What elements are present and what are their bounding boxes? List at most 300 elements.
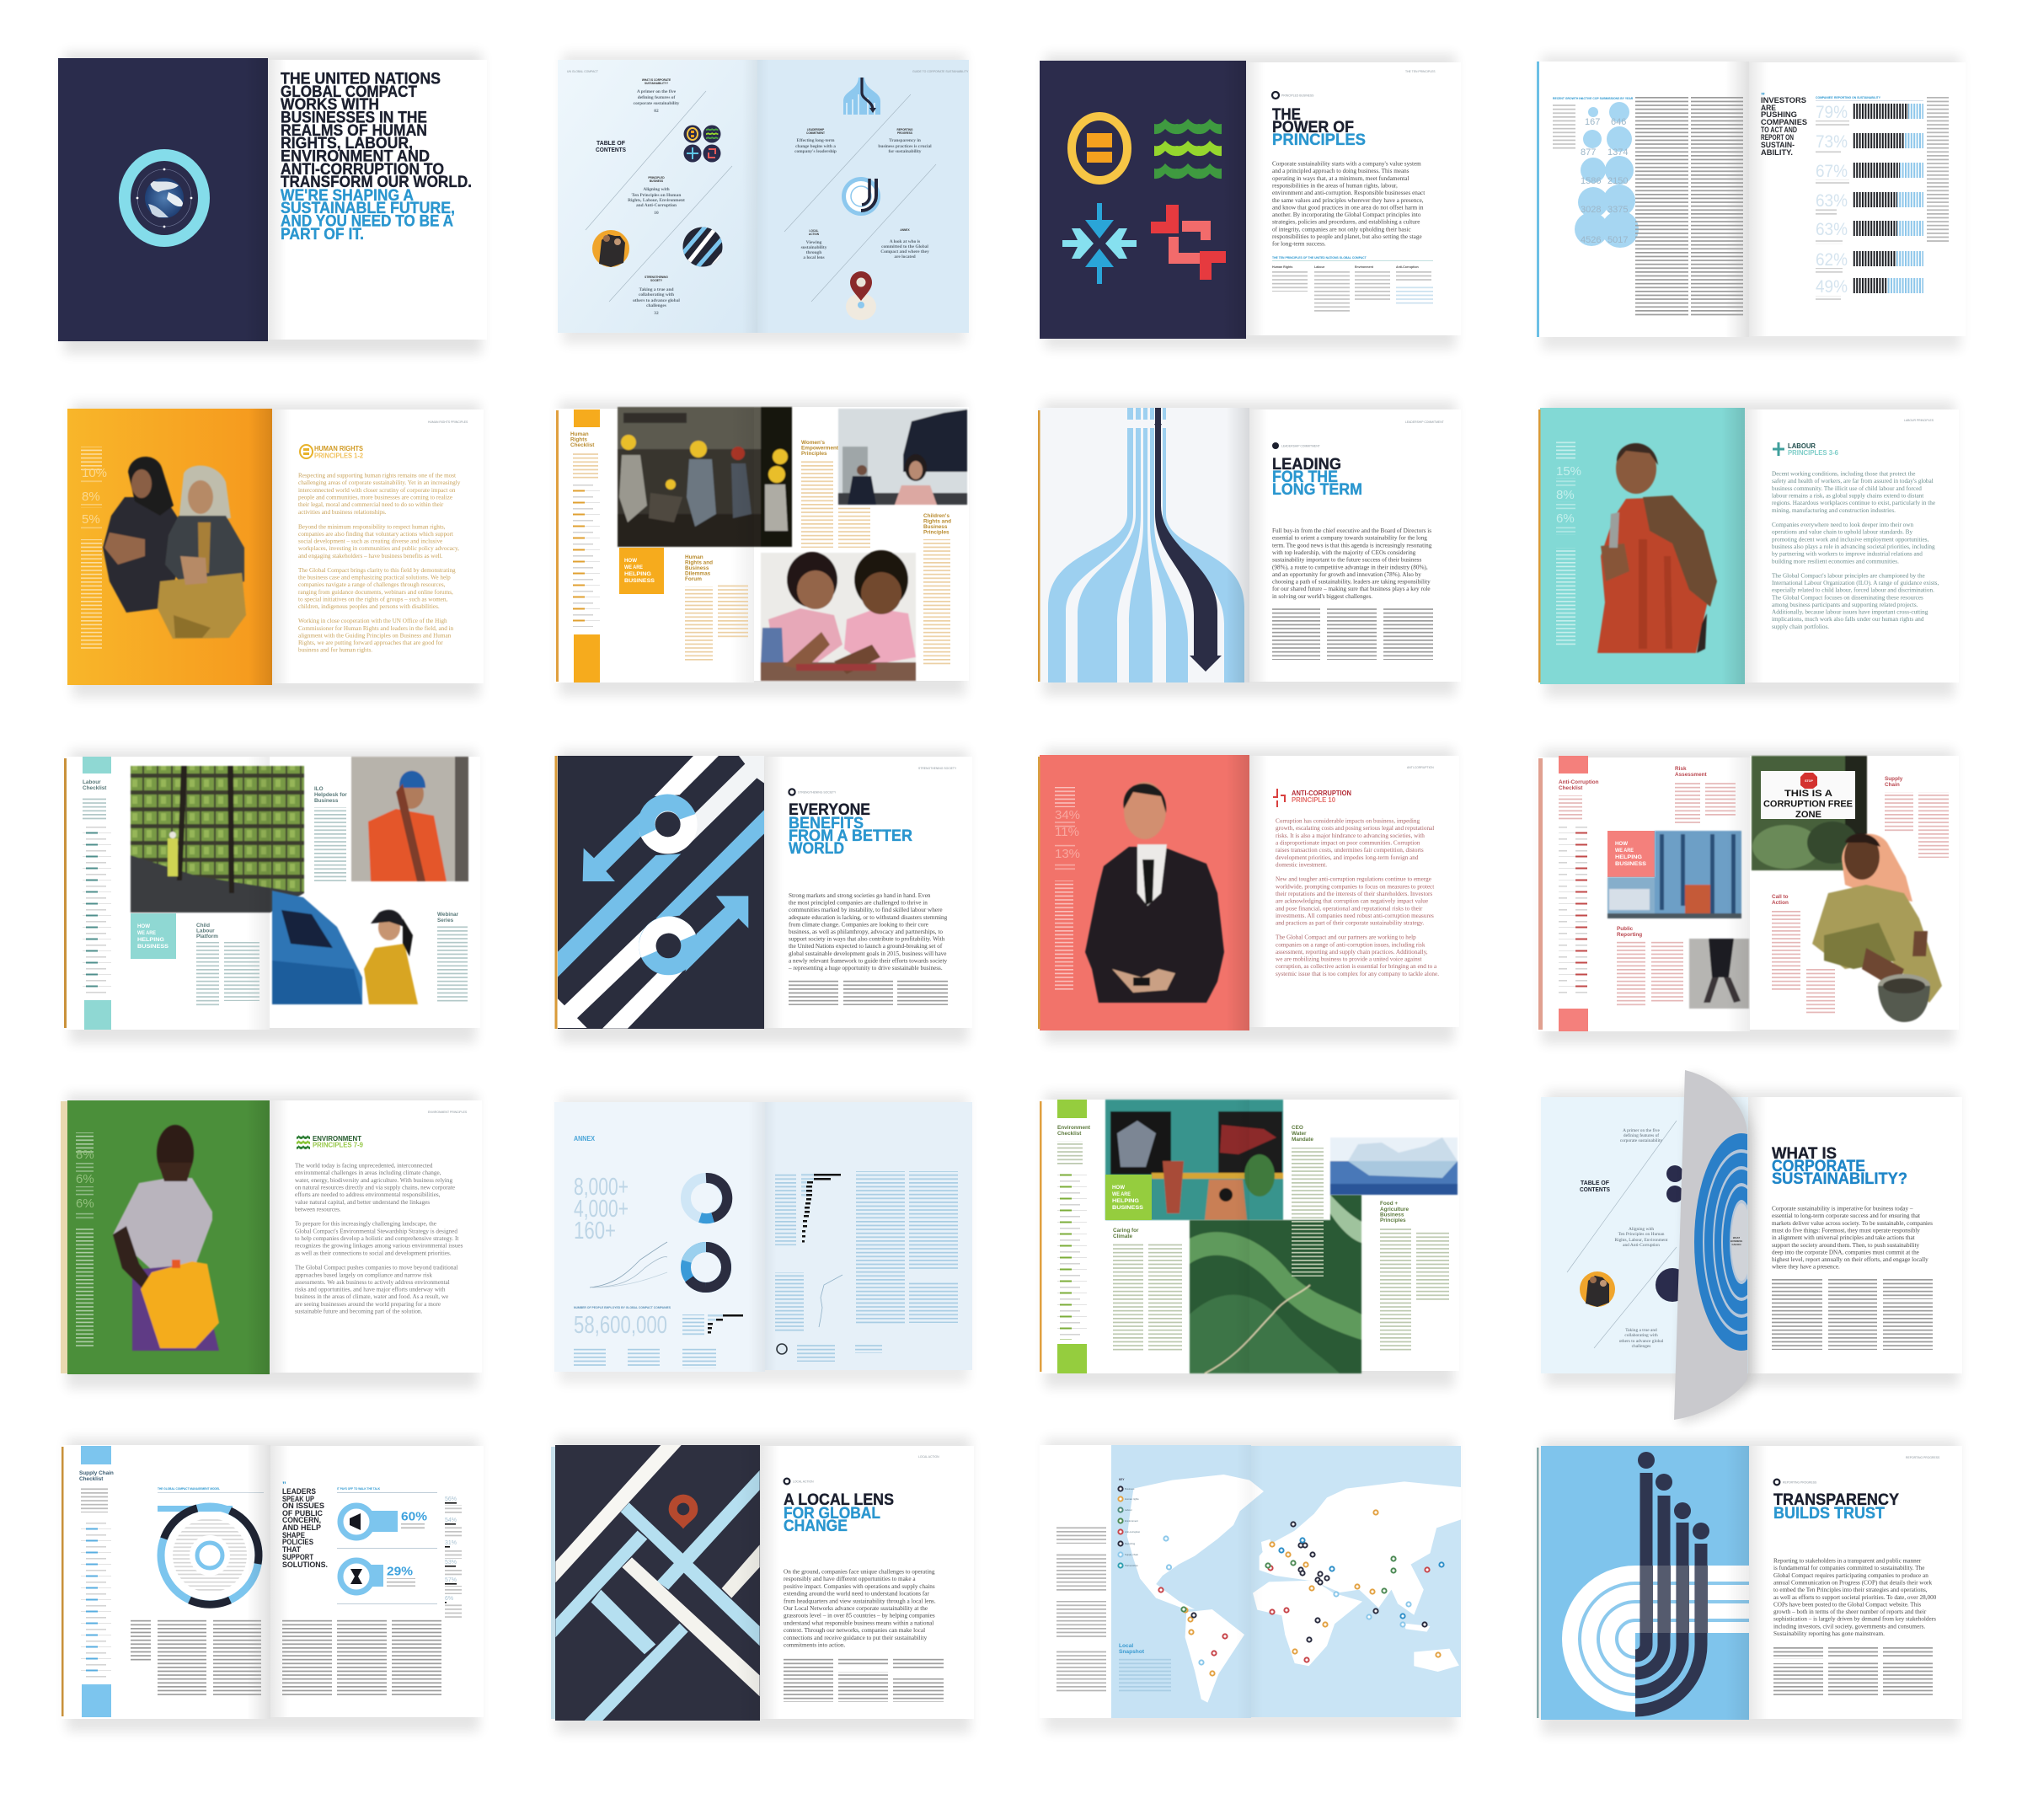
callout: how we are helping business: HELPING bbox=[1112, 1198, 1139, 1204]
text: labour body: promoting decent work and inclusive employment opportunities, bbox=[1772, 536, 1928, 543]
text: section headings: Child bbox=[196, 923, 210, 929]
figure: 58,600,000 employees: NUMBER OF PEOPLE EMPLOYED BY GLOBAL COMPACT COMPANIES bbox=[574, 1306, 671, 1309]
photo: smiling girl with yellow jug bbox=[113, 1125, 219, 1351]
text: local networks body: from headquarters and view sustainability through a local lens. bbox=[784, 1598, 936, 1604]
panel: spread 5, human rights bbox=[67, 403, 484, 698]
heading: leading for the long term: LONG TERM bbox=[1272, 481, 1362, 499]
text: sidebar facts: 8% bbox=[76, 1148, 94, 1162]
text: reporting body: Global Compact requires participating companies to produce an bbox=[1773, 1572, 1928, 1579]
text: local networks body: commitments into action. bbox=[784, 1641, 845, 1648]
text: anti-corruption body: corruption, as collective action is essential for bringing an end to a bbox=[1276, 963, 1437, 970]
text: environment body: water, energy, biodiversity and agriculture. With business relying bbox=[295, 1177, 453, 1184]
text: section label bbox=[789, 789, 837, 795]
text: human rights body: Rights, we are putting forward approaches that are good for bbox=[298, 640, 443, 646]
callout: how we are helping business bbox=[619, 548, 664, 594]
text: society body: communities marked by instability, to find skilled labour where bbox=[789, 907, 943, 913]
text: society body: Strong markets and strong societies go hand in hand. Even bbox=[789, 892, 931, 899]
text: leadership body: term. The good news is that this agenda is increasingly resonating bbox=[1272, 542, 1432, 549]
chart: business participants bars bbox=[682, 1314, 743, 1336]
text: section headings: Checklist bbox=[1057, 1131, 1082, 1137]
chart: stripe bars with percentages: 63% bbox=[1816, 191, 1848, 211]
text: anti-corruption body: companies on a range of anti-corruption issues, including risk bbox=[1276, 941, 1426, 948]
legend: map key: Business bbox=[1125, 1487, 1135, 1491]
text: contents entry, reporting progress: PROGRESS bbox=[897, 131, 912, 135]
chart: stripe bars with percentages: 49% bbox=[1816, 277, 1848, 297]
text: sidebar facts: 5% bbox=[82, 512, 100, 527]
callout: how we are helping business: HOW bbox=[1112, 1185, 1126, 1191]
heading: annex: ANNEX bbox=[574, 1134, 595, 1143]
text: anti-corruption body: worldwide, prompting companies to focus on measures to protect bbox=[1276, 883, 1434, 890]
text: environment body: business in the areas of climate, water and food. As a result, we bbox=[295, 1293, 448, 1300]
text: labour body: The Global Compact's labour principles are championed by the bbox=[1772, 572, 1925, 579]
text: section headings: Rights and bbox=[923, 519, 951, 524]
photo: warehouse stacks bbox=[131, 766, 304, 913]
text: leadership body: with top leadership, with the majority of CEOs considering bbox=[1272, 549, 1416, 556]
photo: girl with metal bowl bbox=[1812, 833, 1942, 1022]
table: the ten principles: Human Rights bbox=[1272, 265, 1292, 269]
sign: this is a corruption free zone: CORRUPTION FREE bbox=[1763, 799, 1853, 809]
callout: how we are helping business: HOW bbox=[624, 558, 638, 564]
text: human rights body: workplaces, investing in communities and public policy advocacy, bbox=[298, 545, 459, 552]
chart: 60 percent stat: IT PAYS OFF TO WALK THE TALK bbox=[337, 1487, 381, 1491]
panel: spread 16, what is corporate sustainability, with turning page bbox=[1541, 1070, 1962, 1423]
text: contents entry, local action: ACTION bbox=[809, 233, 820, 236]
text: intro body: Corporate sustainability starts with a company's value system bbox=[1272, 160, 1421, 167]
table: the ten principles: THE TEN PRINCIPLES OF THE UNITED NATIONS GLOBAL COMPACT bbox=[1272, 256, 1367, 260]
text: environment body: as well as their connections to social and development priorities. bbox=[295, 1250, 452, 1256]
callout: investors quote: INVESTORS bbox=[1761, 96, 1807, 105]
text: intro body: essential to long-term corporate success and for ensuring that bbox=[1772, 1212, 1920, 1219]
chart: stripe bars with percentages: 63% bbox=[1816, 220, 1848, 239]
heading: what is corporate sustainability: CORPORATE bbox=[1772, 1158, 1865, 1175]
text: contents entries: Taking a true and bbox=[1625, 1328, 1657, 1333]
text columns: local network detail bbox=[784, 1657, 944, 1702]
text: intro body: the same values and principles wherever they have a presence, bbox=[1272, 197, 1424, 204]
heading: anti-corruption principle 10 bbox=[1273, 789, 1351, 807]
chart: right column stats: 57% bbox=[445, 1577, 457, 1583]
heading: mission statement: WORKS WITH bbox=[281, 96, 379, 114]
heading: mission statement: TRANSFORM OUR WORLD. bbox=[281, 174, 472, 191]
text: human rights body: children, indigenous peoples and persons with disabilities. bbox=[298, 603, 440, 610]
text: intro body: highest level, report annually on their efforts, and engage locally bbox=[1772, 1256, 1928, 1263]
text: anti-corruption body: assessment, reporting and supply chain practices. Additionally, bbox=[1276, 949, 1428, 956]
text: human rights body: interconnected world with closer scrutiny of corporate impact on bbox=[298, 487, 456, 494]
text: anti-corruption body: development priorities, and impedes long-term foreign and bbox=[1276, 854, 1419, 861]
chart: growth bubbles: 1586 bbox=[1581, 176, 1601, 186]
callout: leaders quote: SHAPE bbox=[282, 1530, 305, 1539]
callout: investors quote: REPORT ON bbox=[1761, 133, 1794, 142]
text: society body: support society in ways that also contribute to profitability. With bbox=[789, 936, 945, 943]
text: section headings: Supply bbox=[1885, 776, 1903, 782]
photo: car assembly worker bbox=[272, 891, 418, 1004]
panel: spread 11, anti-corruption bbox=[1038, 748, 1459, 1043]
text: human rights body: alignment with the Guiding Principles on Business and Human bbox=[298, 632, 452, 639]
text: anti-corruption body: systemic issue that is too complex for any company to tackle alone. bbox=[1276, 971, 1439, 977]
text columns: detail bbox=[1772, 1279, 1933, 1350]
heading: mission statement: ANTI-CORRUPTION TO bbox=[281, 161, 444, 179]
text: contents entry, annex: A look at who is bbox=[890, 239, 920, 244]
callout: investors quote: ABILITY. bbox=[1761, 148, 1793, 158]
callout: how we are helping business: WE ARE bbox=[137, 930, 156, 936]
text: intro body: deep into the corporate DNA, companies must commit at the bbox=[1772, 1249, 1919, 1255]
chart: stripe bars with percentages: 67% bbox=[1816, 162, 1848, 181]
text: environment body: value natural capital, and better understand the linkages bbox=[295, 1199, 430, 1206]
text: section headings: Checklist bbox=[83, 785, 107, 791]
text: contents entry, reporting progress: REPORTING bbox=[897, 128, 913, 131]
text: labour body: operations and value chain to uphold labour standards. By bbox=[1772, 529, 1912, 536]
text: contents entry, strengthening society: challenges bbox=[646, 303, 666, 308]
heading: transparency builds trust: BUILDS TRUST bbox=[1773, 1505, 1885, 1523]
text: running head: ENVIRONMENT PRINCIPLES bbox=[428, 1111, 468, 1114]
text: section headings: Principles bbox=[923, 529, 949, 536]
heading: leading for the long term: FOR THE bbox=[1272, 468, 1338, 486]
text: contents entry, principled business: BUSINESS bbox=[650, 179, 663, 183]
callout: leaders quote: SPEAK UP bbox=[282, 1494, 314, 1503]
chart: management model circle: THE GLOBAL COMPACT MANAGEMENT MODEL bbox=[158, 1487, 220, 1491]
photo: two seated women bbox=[103, 457, 246, 639]
chart: growth lines bbox=[590, 1242, 667, 1287]
text: running heads: GUIDE TO CORPORATE SUSTAINABILITY bbox=[912, 70, 969, 73]
text: environment body: sustainable future and becoming part of the solution. bbox=[295, 1308, 423, 1314]
legend: map key: Partnerships bbox=[1125, 1564, 1138, 1567]
text: section headings: Business bbox=[685, 565, 709, 571]
text: leadership body: choosing a path of sustainability, leaders are taking responsibility bbox=[1272, 579, 1431, 586]
chart: stripe bars with percentages: 62% bbox=[1816, 250, 1848, 270]
text: sidebar facts bbox=[1556, 440, 1581, 646]
chart: growth bubbles: 3375 bbox=[1607, 205, 1628, 215]
text: running head: HUMAN RIGHTS PRINCIPLES bbox=[428, 420, 468, 424]
text: anti-corruption body: and practices as part of their corporate sustainability strategy. bbox=[1276, 920, 1424, 927]
sign: this is a corruption free zone: STOP bbox=[1805, 779, 1813, 783]
chart: 60 percent stat: 60% bbox=[401, 1510, 427, 1523]
heading: the power of principles: THE bbox=[1272, 106, 1301, 124]
text: contents entry, local action: sustainability bbox=[801, 245, 827, 250]
text: contents entry, local action: through bbox=[806, 250, 821, 255]
text: anti-corruption body: risks. It is also a major hindrance to advancing societies, with bbox=[1276, 832, 1425, 839]
text: section headings: Children's bbox=[923, 513, 949, 519]
text: human rights body: Beyond the minimum responsibility to respect human rights, bbox=[298, 523, 446, 530]
photo: green hills with wind turbines bbox=[1190, 1195, 1361, 1373]
text: human rights body: companies navigate a range of challenges through resources, bbox=[298, 581, 446, 588]
text: human rights body: Working in close cooperation with the UN Office of the High bbox=[298, 618, 447, 624]
text: intro body: responsibilities to people and planet, but also setting the stage bbox=[1272, 233, 1422, 240]
text: contents entry, strengthening society: collaborating with bbox=[639, 292, 674, 297]
heading: everyone benefits from a better world: FROM A BETTER bbox=[789, 827, 912, 845]
text columns: human rights programme copy bbox=[573, 453, 950, 666]
chart: stripe bars with percentages: 79% bbox=[1816, 103, 1848, 122]
heading: leading for the long term: LEADING bbox=[1272, 456, 1341, 474]
text columns: annex copy bbox=[574, 1171, 958, 1368]
text: environment body: To prepare for this increasingly challenging landscape, the bbox=[295, 1221, 436, 1228]
text: contents entry, principled business: Aligning with bbox=[643, 187, 670, 192]
text: environment body: The Global Compact pushes companies to move beyond traditional bbox=[295, 1265, 458, 1271]
callout: leaders quote: CONCERN, bbox=[282, 1515, 321, 1524]
text: intro body: another. By incorporating the Global Compact principles into bbox=[1272, 211, 1421, 218]
text: reporting body: growth – both in terms of the sheer number of reports and their bbox=[1773, 1609, 1927, 1615]
icon: orange portrait circle bbox=[1580, 1271, 1615, 1307]
text: human rights body: Respecting and supporting human rights remains one of the most bbox=[298, 472, 456, 479]
text: environment body: to help companies develop a holistic and comprehensive strategy. It bbox=[295, 1235, 458, 1242]
panel: spread 15, environment programmes bbox=[1040, 1093, 1459, 1388]
text: local networks body: understand what responsible business means within a national bbox=[784, 1619, 933, 1626]
text: contents entry, what is corporate sustainability: SUSTAINABILITY? bbox=[645, 82, 668, 85]
callout: how we are helping business: BUSINESS bbox=[624, 578, 655, 584]
text: local networks body: context. Through our networks, companies can make local bbox=[784, 1627, 925, 1634]
text: sidebar facts: 34% bbox=[1055, 808, 1080, 822]
text: section headings: Agriculture bbox=[1380, 1207, 1410, 1212]
heading: mission statement: AND YOU NEED TO BE A bbox=[281, 212, 453, 231]
panel: spread 14, annex bbox=[554, 1095, 972, 1384]
map pins: local networks bbox=[1158, 1510, 1444, 1676]
callout: leaders quote: OF PUBLIC bbox=[282, 1508, 323, 1518]
text: contents entries: Ten Principles on Human bbox=[1618, 1232, 1665, 1237]
text: section label bbox=[784, 1479, 814, 1484]
figures: participant totals: 8,000+ bbox=[574, 1174, 629, 1201]
text: anti-corruption body: we are mobilizing business to provide a united voice against bbox=[1276, 956, 1421, 963]
callout: how we are helping business: WE ARE bbox=[1615, 848, 1634, 854]
sign: this is a corruption free zone bbox=[1761, 771, 1855, 820]
text: section headings: Webinar bbox=[437, 912, 459, 918]
chart: top countries bars bbox=[775, 1174, 841, 1245]
text: labour body: The Global Compact focuses on disseminating these resources bbox=[1772, 594, 1923, 601]
chart: growth bubbles: 3028 bbox=[1581, 205, 1601, 215]
text: leadership body: Full buy-in from the chief executive and the Board of Directors is bbox=[1272, 527, 1431, 534]
text: environment body: environmental challenges in areas including climate change, bbox=[295, 1170, 441, 1176]
text: contents entry, leadership commitment: company's leadership bbox=[794, 149, 837, 154]
text: leadership body: in solving our world's biggest challenges. bbox=[1272, 593, 1372, 600]
heading: the power of principles: PRINCIPLES bbox=[1272, 131, 1366, 149]
text: checklist heading: Supply Chain bbox=[79, 1470, 114, 1476]
callout: how we are helping business bbox=[131, 913, 176, 959]
figures: participant totals: 4,000+ bbox=[574, 1196, 629, 1223]
text: anti-corruption body: Corruption has considerable impacts on business, impeding bbox=[1276, 817, 1420, 824]
chart: top sectors slope bbox=[775, 1272, 842, 1331]
callout: leaders quote: AND HELP bbox=[282, 1523, 321, 1532]
text: contents heading: TABLE OF bbox=[1581, 1179, 1609, 1186]
text: section headings: Environment bbox=[1057, 1125, 1091, 1131]
text: human rights body: and engaging stakeholders – have business benefits as well. bbox=[298, 553, 443, 559]
text: anti-corruption body: growth, escalating costs and posing serious legal and reputational bbox=[1276, 825, 1434, 832]
text: right sidebar bbox=[1927, 97, 1949, 242]
text: reporting body: Reporting to stakeholders in a transparent and public manner bbox=[1773, 1557, 1922, 1564]
callout: how we are helping business: HELPING bbox=[624, 571, 651, 577]
text: anti-corruption body: The Global Compact and our partners are working to help bbox=[1276, 934, 1416, 941]
text: reporting body: sophistication – is largely driven by demand from key stakeholders bbox=[1773, 1616, 1936, 1623]
table: the ten principles: Anti-Corruption bbox=[1396, 265, 1419, 269]
text: section headings: Business bbox=[923, 524, 948, 530]
text columns: model detail bbox=[131, 1618, 441, 1695]
text: section headings: Checklist bbox=[570, 442, 595, 448]
legend: map key: Labour bbox=[1125, 1508, 1132, 1512]
text: anti-corruption body: investments. All companies need robust anti-corruption measures bbox=[1276, 913, 1434, 919]
text: contents entry, principled business: and Anti-Corruption bbox=[636, 203, 677, 208]
chart: growth bubbles bbox=[1575, 97, 1639, 248]
heading: mission statement: PART OF IT. bbox=[281, 226, 364, 244]
text: section label: LEADERSHIP COMMITMENT bbox=[1281, 445, 1320, 448]
icon group: four principles badges bbox=[684, 125, 721, 162]
chart: growth bubbles: 2150 bbox=[1607, 176, 1628, 186]
margin bars bbox=[81, 1446, 111, 1717]
photo: corruption free zone sign bbox=[1752, 756, 1867, 870]
text: contents entry, leadership commitment: LEADERSHIP bbox=[807, 128, 825, 131]
heading: mission statement: WE'RE SHAPING A bbox=[281, 187, 414, 205]
margin bars bbox=[83, 757, 111, 1030]
chart: world map continents bbox=[1127, 1475, 1461, 1703]
text: human rights body: the business case and emphasizing practical solutions. We help bbox=[298, 575, 451, 581]
text: human rights body: social development – such as creating diverse and inclusive bbox=[298, 538, 442, 545]
table: the ten principles: Environment bbox=[1355, 265, 1374, 269]
text: local networks body: grassroots level – in over 85 countries – by helping companies bbox=[784, 1613, 935, 1619]
photo: warehouse forklift bbox=[1607, 831, 1741, 918]
text: section headings: Assessment bbox=[1675, 772, 1708, 778]
text columns: leadership detail bbox=[1272, 608, 1433, 660]
text: reporting body: to embed the Ten Principles into their strategies and operations, bbox=[1773, 1587, 1928, 1593]
text: environment body: risks and opportunities, and have major efforts underway with bbox=[295, 1287, 446, 1293]
heading: environment principles 7-9 bbox=[297, 1135, 364, 1149]
chart: growth bubbles: 646 bbox=[1611, 117, 1626, 127]
illustration: concentric j figures bbox=[1562, 1452, 1749, 1712]
heading: labour principles 3-6 bbox=[1773, 442, 1839, 457]
text: running head: LABOUR PRINCIPLES bbox=[1904, 419, 1934, 422]
icon: concentric j circle bbox=[842, 177, 880, 216]
text: section headings: Labour bbox=[83, 779, 101, 785]
icon: earth in ring bbox=[125, 155, 204, 241]
callout: how we are helping business: BUSINESS bbox=[1615, 861, 1647, 867]
heading: labour principles 3-6: PRINCIPLES 3-6 bbox=[1788, 449, 1839, 457]
text: environment body: on natural resources directly and via supply chains, new corporate bbox=[295, 1184, 455, 1191]
callout: how we are helping business: HOW bbox=[137, 923, 151, 929]
heading: labour principles 3-6: LABOUR bbox=[1788, 442, 1816, 450]
text: contents entry, reporting progress: Transparency in bbox=[889, 138, 921, 143]
text: local networks body: connections and receive guidance to put their sustainability bbox=[784, 1635, 928, 1641]
panel: spread 2, table of contents bbox=[558, 53, 969, 344]
heading: anti-corruption principle 10: PRINCIPLE 10 bbox=[1292, 796, 1336, 804]
text: section headings: CEO bbox=[1292, 1125, 1303, 1131]
icon: un seal bbox=[777, 1344, 787, 1354]
illustration: street map and pin bbox=[555, 1444, 760, 1721]
text: intro body: environment and anti-corruption. Responsible businesses enact bbox=[1272, 190, 1425, 196]
margin bars bbox=[1057, 1100, 1087, 1373]
text columns: reporting detail bbox=[1773, 1646, 1933, 1697]
text: section label bbox=[1272, 442, 1320, 449]
legend: map key: Environment bbox=[1125, 1519, 1138, 1523]
panel: spread 3, the power of principles bbox=[1040, 54, 1461, 349]
text: contents entry, what is corporate sustainability: defining features of bbox=[638, 95, 675, 100]
text: running heads: UN GLOBAL COMPACT bbox=[567, 70, 598, 73]
photo: worker in orange suit bbox=[351, 757, 468, 881]
text: section headings: Risk bbox=[1675, 766, 1687, 772]
callout: how we are helping business: BUSINESS bbox=[137, 944, 169, 950]
text: section label: STRENGTHENING SOCIETY bbox=[798, 790, 837, 794]
text: sidebar facts: 6% bbox=[76, 1196, 94, 1211]
text: intro body: operating in ways that, at a minimum, meet fundamental bbox=[1272, 175, 1409, 182]
text: running head: THE TEN PRINCIPLES bbox=[1405, 70, 1436, 73]
text: intro body: for long-term success. bbox=[1272, 241, 1326, 248]
text: society body: global sustainable development goals in 2015, business will have bbox=[789, 950, 946, 957]
panel: spread 18, a local lens bbox=[551, 1437, 974, 1733]
panel: spread 6, human rights programmes bbox=[554, 401, 969, 696]
chart: stripe bars with percentages bbox=[1816, 96, 1923, 302]
callout: investors quote: ARE bbox=[1761, 104, 1777, 113]
text: contents entry, local action: LOCAL bbox=[810, 229, 819, 233]
sign: this is a corruption free zone: ZONE bbox=[1795, 810, 1821, 820]
heading: mission statement: BUSINESSES IN THE bbox=[281, 110, 427, 126]
text: section headings: Principles bbox=[801, 451, 827, 457]
figures: participant totals: 160+ bbox=[574, 1218, 616, 1245]
text: labour body: business community. The illicit use of child labour and forced bbox=[1772, 485, 1922, 492]
text: intro body: strategies, policies and procedures, and establishing a culture bbox=[1272, 219, 1420, 226]
text columns: labour programme copy bbox=[83, 797, 468, 1007]
heading: the power of principles: POWER OF bbox=[1272, 119, 1354, 136]
chart: growth bubbles: 877 bbox=[1581, 147, 1596, 158]
chart: growth bubbles: 4526 bbox=[1581, 235, 1601, 245]
text: sidebar facts bbox=[76, 1132, 94, 1346]
heading: mission statement: REALMS OF HUMAN bbox=[281, 122, 427, 140]
text: human rights body: Commissioner for Human Rights and leaders in the field, and in bbox=[298, 625, 454, 632]
text: section headings: Mandate bbox=[1292, 1137, 1313, 1143]
photo: construction workers bbox=[618, 407, 792, 547]
text: contents entry, annex: committed to the Global bbox=[881, 244, 928, 249]
chart: right column stats: 6% bbox=[445, 1596, 453, 1602]
chart: stripe bars with percentages: 73% bbox=[1816, 132, 1848, 152]
photo: worker with chains bbox=[1597, 443, 1717, 653]
heading: what is corporate sustainability: SUSTAINABILITY? bbox=[1772, 1170, 1907, 1188]
text columns: article bbox=[1635, 97, 1743, 316]
text: human rights body: to special initiatives on the rights of groups – such as women, bbox=[298, 596, 447, 602]
text: section headings: Business bbox=[314, 798, 339, 804]
text: contents heading: CONTENTS bbox=[1580, 1186, 1610, 1193]
text: sidebar facts: 10% bbox=[82, 466, 107, 480]
text: labour body: International Labour Organization (ILO). A range of guidance exists, bbox=[1772, 580, 1939, 586]
text: contents entry, leadership commitment: change begins with a bbox=[795, 144, 836, 149]
text: labour body: business also plays a role in advancing societal priorities, including bbox=[1772, 543, 1935, 550]
heading: local snapshot: Snapshot bbox=[1119, 1649, 1145, 1655]
text: section headings: Anti-Corruption bbox=[1559, 779, 1599, 785]
text: environment body: efforts are needed to address environmental responsibilities, bbox=[295, 1191, 441, 1198]
text: human rights body: ranging from guidance documents, webinars and online forums, bbox=[298, 589, 453, 596]
text: environment body: approaches based largely on compliance and narrow risk bbox=[295, 1271, 432, 1278]
text: local networks body: extending around the world need to understand locations far bbox=[784, 1591, 929, 1598]
text: environment body: are seeing businesses around the world preparing for a more bbox=[295, 1301, 441, 1308]
text: contents entries: collaborating with bbox=[1624, 1333, 1658, 1338]
text: society body: the most principled companies are challenged to thrive in bbox=[789, 900, 928, 907]
text: contents entry, strengthening society: SOCIETY bbox=[650, 279, 663, 282]
text: section label bbox=[1272, 92, 1314, 99]
heading: mission statement: THE UNITED NATIONS bbox=[281, 71, 441, 88]
text: contents entry, what is corporate sustainability: A primer on the five bbox=[637, 89, 677, 94]
icon: environment waves bbox=[1154, 119, 1222, 179]
chart: right column stats: 53% bbox=[445, 1560, 457, 1566]
text: labour body: labour remains a risk, as global supply chains extend to distant bbox=[1772, 492, 1923, 499]
text: section headings: Human bbox=[685, 554, 703, 560]
text: human rights body: their legal, moral and commercial need to do so within their bbox=[298, 501, 444, 508]
chart: growth bubbles: 1374 bbox=[1607, 147, 1628, 158]
text: sidebar facts bbox=[81, 447, 107, 649]
text: intro body: markets deliver value across society. To be sustainable, companies bbox=[1772, 1220, 1933, 1227]
panel: spread 8, labour bbox=[1538, 401, 1959, 698]
callout: leaders quote: POLICIES bbox=[282, 1537, 313, 1546]
illustration: turning page with blue rings: CAN DO bbox=[1731, 1243, 1741, 1246]
illustration: turning page with blue rings bbox=[1674, 1070, 1757, 1426]
heading: a local lens for global change: A LOCAL LENS bbox=[784, 1491, 894, 1509]
text: contents entries: Aligning with bbox=[1629, 1227, 1654, 1232]
text: running head: LEADERSHIP COMMITMENT bbox=[1405, 420, 1444, 424]
text: leadership body: for our shared future – making sure that business plays a key role bbox=[1272, 586, 1431, 592]
callout: leaders quote: SOLUTIONS. bbox=[282, 1560, 328, 1569]
text: anti-corruption body: their reputations and the interests of their shareholders. Investors bbox=[1276, 891, 1432, 897]
text: snapshot copy bbox=[1119, 1657, 1171, 1693]
heading: mission statement: ENVIRONMENT AND bbox=[281, 148, 430, 165]
